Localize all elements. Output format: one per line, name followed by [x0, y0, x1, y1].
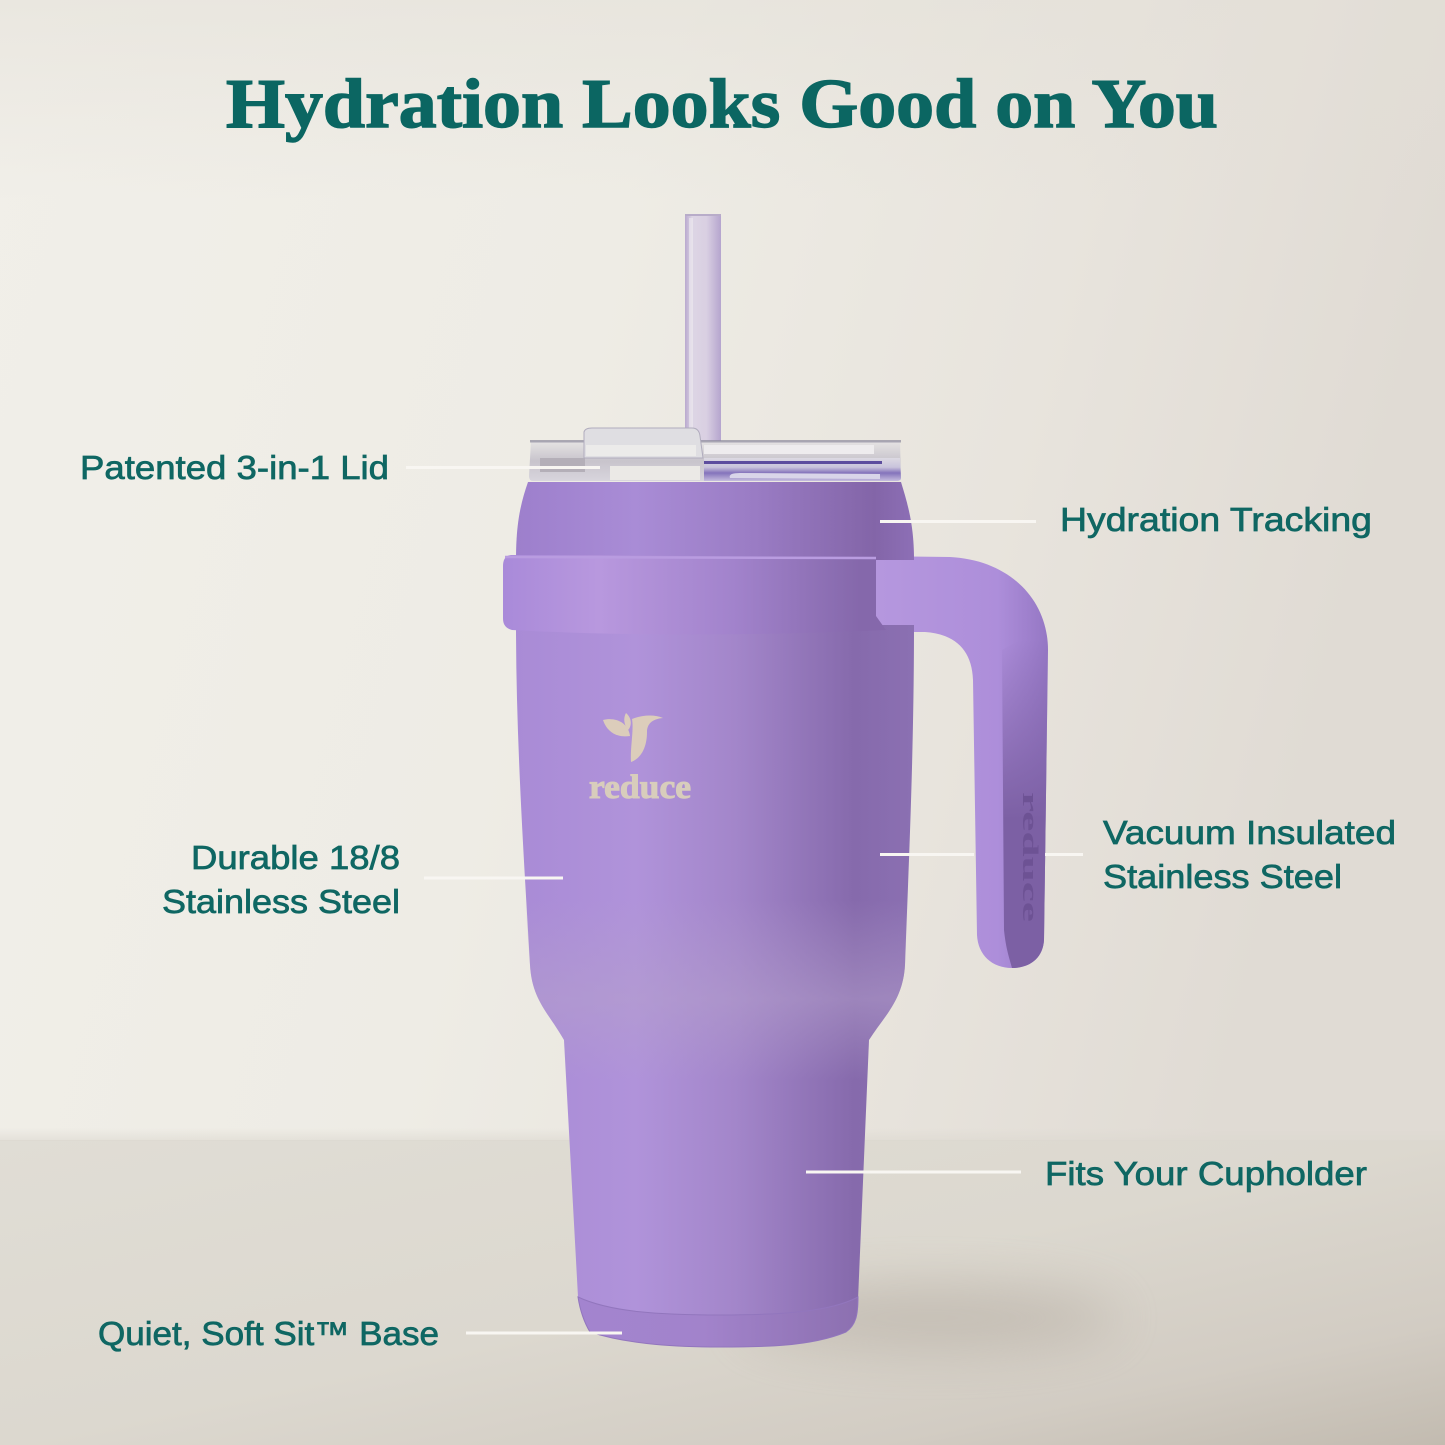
- callout: durable steel: [162, 839, 563, 920]
- handle: [872, 556, 1048, 968]
- callout: vacuum insulated: Stainless Steel: [1103, 858, 1342, 895]
- tumbler cast shadow: [740, 1286, 1120, 1350]
- callout: durable steel: Durable 18/8: [191, 839, 400, 876]
- straw: [685, 214, 721, 444]
- handle collar: [503, 555, 886, 634]
- background floor: [0, 1140, 1445, 1445]
- lid: [529, 428, 901, 481]
- callout: vacuum insulated: [880, 814, 1396, 895]
- soft sit base: [578, 1297, 858, 1347]
- tumbler illustration: [503, 214, 1048, 1347]
- title: Hydration Looks Good on You: [226, 66, 1218, 143]
- callout: vacuum insulated: Vacuum Insulated: [1103, 814, 1396, 851]
- callout: soft sit base: Quiet, Soft Sit™ Base: [98, 1315, 439, 1352]
- logo wordmark: reduce: [589, 769, 691, 806]
- handle logo: reduce: [1018, 792, 1043, 922]
- taper highlight: [525, 900, 908, 1080]
- callout: hydration tracking: Hydration Tracking: [1060, 501, 1372, 538]
- callout: durable steel: Stainless Steel: [162, 883, 400, 920]
- upper body: [516, 482, 914, 560]
- main body: [516, 625, 914, 1347]
- background wall: [0, 0, 1445, 1142]
- callout: patented lid: Patented 3-in-1 Lid: [80, 449, 389, 486]
- logo sprout: [603, 713, 663, 762]
- engraved logo: [589, 713, 691, 806]
- callout: cupholder: Fits Your Cupholder: [1045, 1155, 1367, 1192]
